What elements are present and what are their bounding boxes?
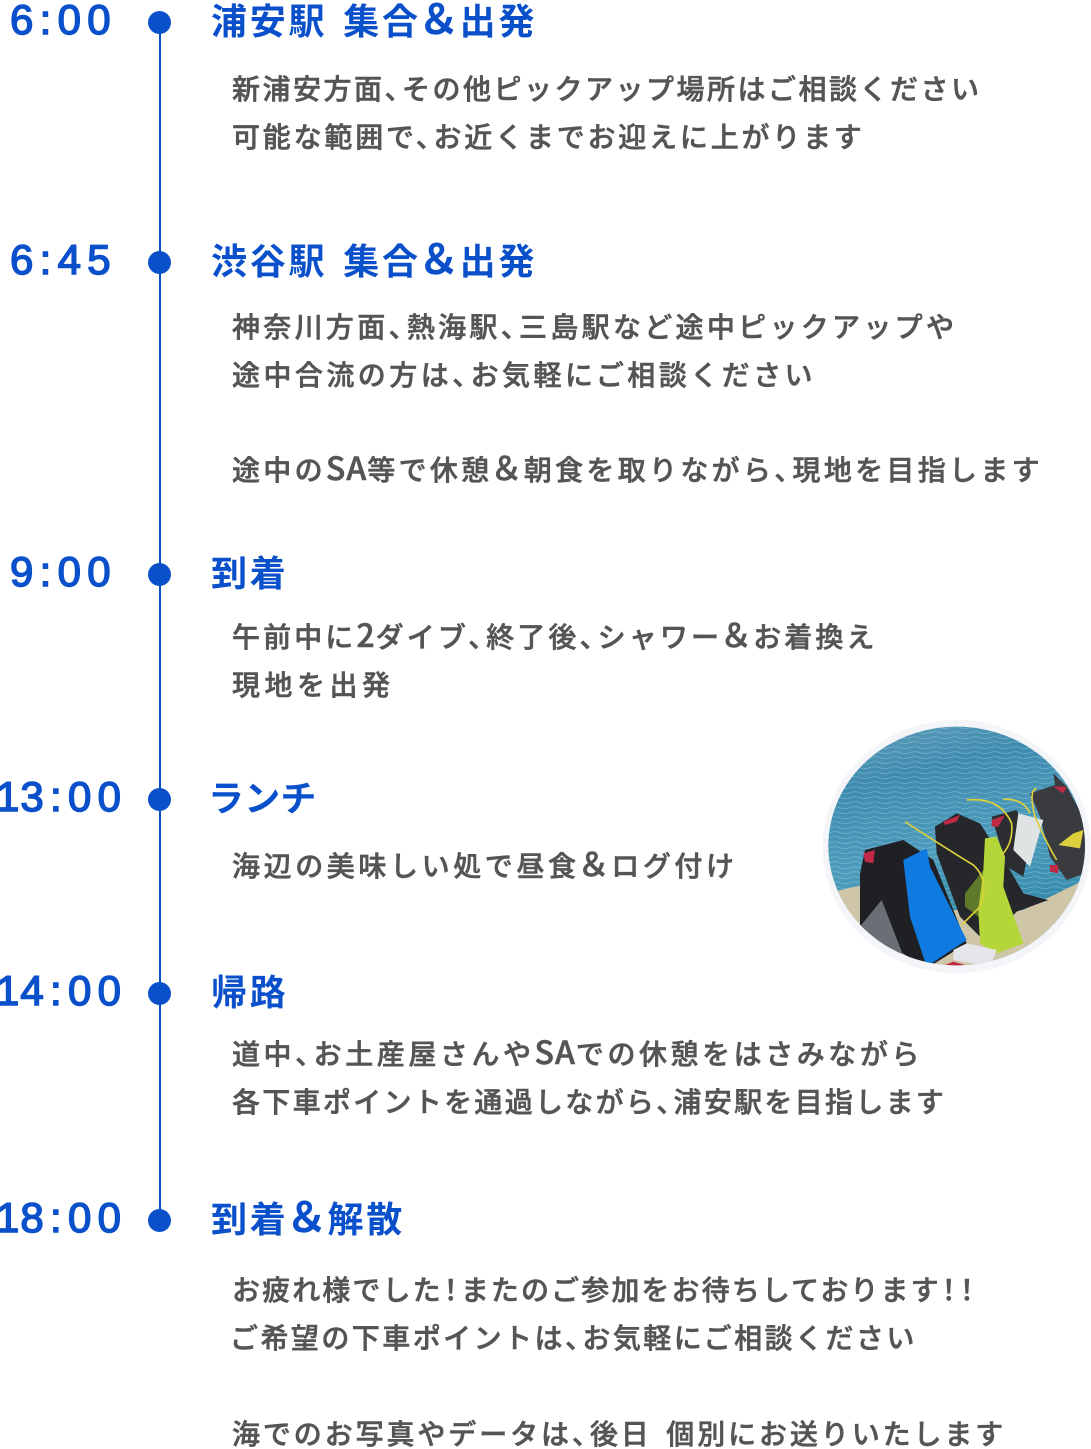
marker dot [148, 982, 171, 1005]
photo content [828, 726, 1085, 966]
text block: 14:00 line 1: 道中、お土産屋さんやSAでの休憩をはさみながら [232, 1028, 923, 1074]
text block: 6:45 line 1: 神奈川方面、熱海駅、三島駅など途中ピックアップや [232, 312, 957, 343]
item: 18:00 [0, 1194, 405, 1241]
time 9:00: 9:00 [10, 548, 117, 595]
item: 14:00 [0, 967, 289, 1014]
item: 9:00 [10, 548, 289, 595]
marker dot [148, 251, 171, 274]
marker dot [148, 1209, 171, 1232]
text block: 6:45 line 2: 途中合流の方は、お気軽にご相談ください [232, 360, 816, 391]
marker dot [148, 563, 171, 586]
photo frame [823, 720, 1091, 973]
time 6:45: 6:45 [10, 236, 117, 283]
item: 13:00 [0, 773, 317, 820]
text block: 6:45 line 3: 途中のSA等で休憩＆朝食を取りながら、現地を目指します [232, 444, 1043, 490]
marker dot [148, 788, 171, 811]
marker dot [148, 11, 171, 34]
text block: 9:00 line 2: 現地を出発 [232, 670, 395, 701]
text block: 18:00 line 2: ご希望の下車ポイントは、お気軽にご相談ください [230, 1323, 917, 1354]
text block: 14:00 line 2: 各下車ポイントを通過しながら、浦安駅を目指します [232, 1087, 946, 1118]
heading: 渋谷駅 集合＆出発 [211, 237, 537, 283]
text block: 9:00 line 1: 午前中に2ダイブ、終了後、シャワー＆お着換え [232, 611, 878, 657]
item: 6:45 [10, 236, 537, 283]
photo: diving gear by the sea [823, 720, 1090, 974]
heading: 到着 [211, 553, 289, 594]
text block: 6:00 line 2: 可能な範囲で、お近くまでお迎えに上がります [232, 122, 865, 153]
timeline line [159, 22, 161, 1220]
item: 6:00 [10, 0, 537, 43]
text block: 18:00 line 1: お疲れ様でした！またのご参加をお待ちしております！！ [232, 1275, 983, 1306]
text block: 13:00: 海辺の美味しい処で昼食＆ログ付け [232, 847, 738, 883]
text block: 6:00 line 1: 新浦安方面、その他ピックアップ場所はご相談ください [232, 74, 982, 105]
heading: ランチ [208, 778, 317, 819]
heading: 到着＆解散 [211, 1195, 405, 1241]
heading: 帰路 [211, 972, 289, 1013]
